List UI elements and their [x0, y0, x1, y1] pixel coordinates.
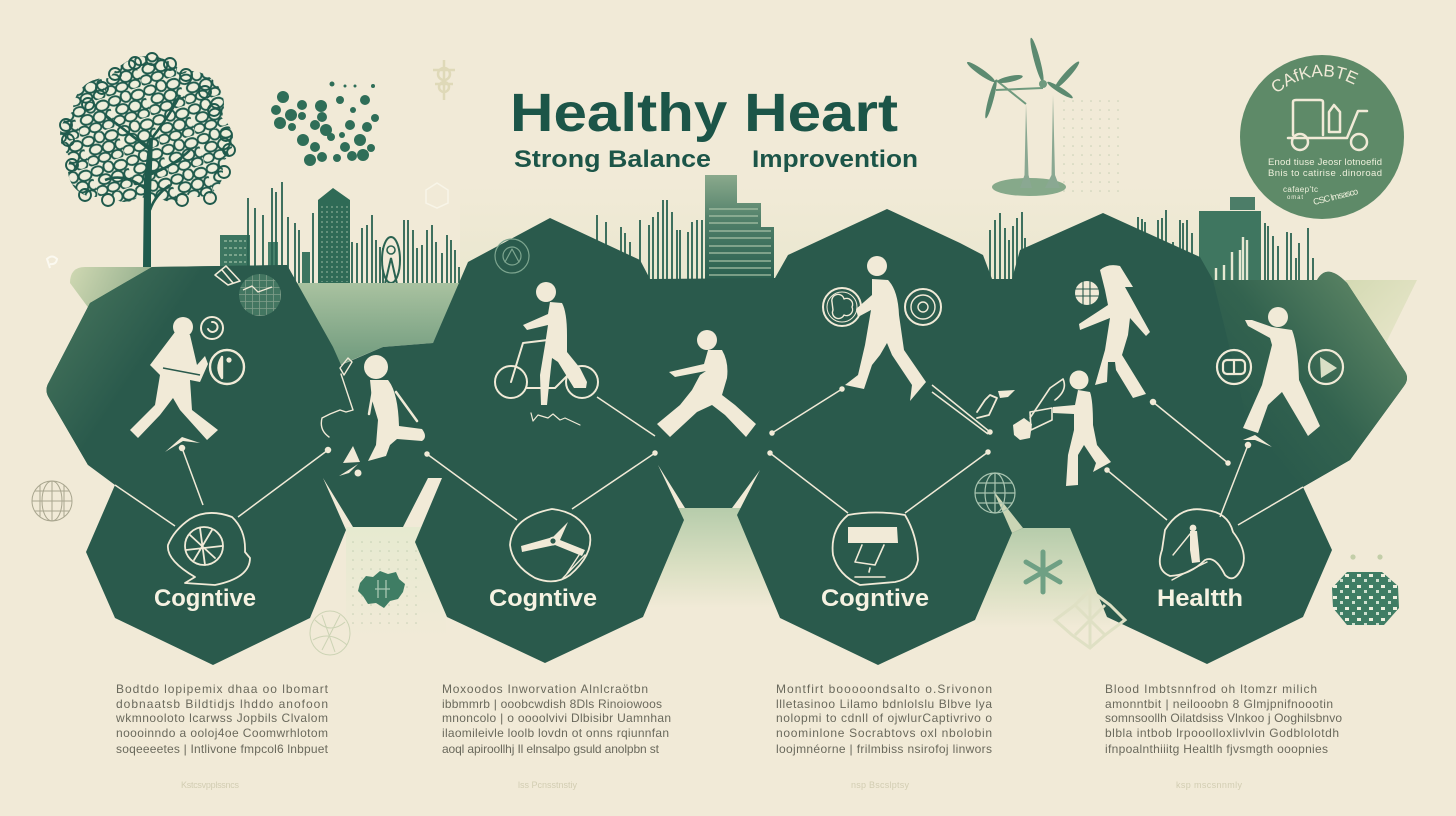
left hexagon shading: [46, 265, 320, 465]
subtitle left: Strong Balance: [514, 146, 711, 173]
text block four: somnsoollh Oilatdsiss Vlnkoo j Ooghilsbnvo: [1105, 711, 1342, 725]
badge heading: CAfKABTE: [1272, 64, 1358, 92]
decorative dots: [1350, 554, 1383, 560]
icon: turbine in head: [510, 509, 590, 581]
text block one: dobnaatsb Bildtidjs lhddo anofoon: [116, 697, 328, 711]
icon: cart: [1288, 100, 1367, 150]
badge text: cafaep'tc: [1283, 185, 1318, 194]
illustration: leaf cluster: [271, 82, 379, 166]
band between skyline and first gap: [287, 283, 460, 365]
figure: cyclist: [495, 239, 598, 425]
icon: play button: [1309, 350, 1343, 384]
pale beam by globe: [993, 490, 1023, 533]
text block four: amonntbit | neilooobn 8 Glmjpnifnoootin: [1105, 697, 1333, 711]
node: cognitive one: [154, 513, 256, 612]
scribble marker: [321, 358, 353, 437]
badge text: Enod tiuse Jeosr lotnoefid: [1268, 157, 1382, 168]
connector lines: [115, 385, 1303, 526]
footnote one: Kstcsvpplssncs: [181, 780, 240, 790]
hexagon network panel: [46, 209, 1407, 665]
illustration: pale sun ornament: [433, 60, 455, 100]
text block four: Blood Imbtsnnfrod oh ltomzr milich: [1105, 682, 1317, 696]
skyline: centre buildings: [597, 175, 774, 280]
wash in gap one: [346, 527, 446, 637]
icon: small ornament circle: [495, 239, 529, 273]
label: Healtth: [1157, 585, 1243, 612]
label: Cogntive: [821, 585, 929, 612]
text block three: Montfirt booooondsalto o.Srivonon: [776, 682, 992, 696]
figure: runner: [657, 330, 756, 437]
icon: wire globe right: [975, 473, 1015, 513]
icon: white marker: [47, 256, 57, 268]
text block two: ilaomileivle loolb lovdn ot onns rqiunnfan: [442, 726, 669, 740]
footnote two: lss Pcnsstnstiy: [518, 780, 578, 790]
dot field in gap one: [352, 540, 422, 630]
icon: moss blob: [358, 571, 405, 608]
background wash behind the skyline: [460, 185, 1220, 285]
illustration: tree: [60, 53, 235, 267]
illustration: wind turbines: [965, 37, 1081, 196]
icon: pale brain sketch: [310, 611, 350, 655]
badge text: omat: [1287, 195, 1303, 201]
text block three: noominlone Socrabtovs oxl nbolobin: [776, 726, 992, 740]
figure: woman walking: [1075, 265, 1150, 398]
text block two: aoql apiroollhj Il elnsalpo gsuld anolpbn st: [442, 742, 660, 756]
right hexagon shading: [1213, 272, 1407, 500]
icon: large circle: [210, 350, 244, 384]
figure: walker with book: [130, 317, 244, 452]
icon: wire globe left: [32, 481, 72, 521]
icon: pale lace pattern: [1055, 590, 1125, 648]
text block one: noooinndo a ooloj4oe Coomwrhlotom: [116, 726, 328, 740]
wash in gap two: [640, 508, 780, 608]
text block one: [115, 682, 329, 756]
footnote three: nsp Bscslptsy: [851, 780, 910, 790]
light block behind left hexagon: [70, 267, 160, 310]
icon: stop button: [1217, 350, 1251, 384]
node: cognitive two: [489, 509, 597, 612]
chevron marker: [165, 437, 200, 452]
wash in gap three: [975, 528, 1110, 628]
light block behind right hexagon: [1345, 280, 1417, 345]
text block two: Moxoodos Inworvation Alnlcraötbn: [442, 682, 648, 696]
icon: top left diamond and globe: [215, 266, 281, 316]
icon: brain in head: [168, 513, 250, 585]
text block three: loojmnéorne | frilmbiss nsirofoj linwors: [776, 742, 992, 756]
icon: snowflake: [1026, 552, 1060, 592]
skyline: right buildings: [990, 197, 1313, 281]
node: health: [1157, 509, 1244, 612]
text block one: soqeeeetes | Intlivone fmpcol6 lnbpuet: [116, 742, 329, 756]
figure: walker with two circles: [823, 256, 941, 401]
text block three: llletasinoo Lilamo bdnlolslu Blbve lya: [776, 697, 992, 711]
badge text: Bnis to catirise .dinoroad: [1268, 168, 1382, 179]
node: cognitive three: [821, 512, 929, 612]
figure: child with dog: [1013, 370, 1111, 486]
badge text: CSC lmsasco: [1312, 186, 1359, 207]
icon: head with hiker: [1160, 509, 1244, 580]
illustration: faint hexagon outline: [426, 183, 448, 208]
skyline: left buildings: [220, 182, 459, 285]
icon: head outline: [833, 512, 918, 585]
icon: knot circle: [823, 288, 861, 326]
icon: dog on leash: [1013, 379, 1064, 440]
icon: bicycle: [495, 340, 598, 398]
label: Cogntive: [154, 585, 256, 612]
figure: kneeling child: [321, 355, 425, 476]
footnote four: ksp mscsnnmly: [1176, 780, 1242, 790]
title: Healthy Heart: [510, 83, 898, 143]
chevron marker: [1243, 435, 1272, 447]
icon: spiral circle: [201, 317, 223, 339]
dot field near turbines: [1060, 95, 1120, 195]
text block four: ifnpoalnthiiitg Healtlh fjvsmgth ooopnies: [1105, 742, 1328, 756]
text block four: [1105, 682, 1342, 756]
icon: small animal: [977, 390, 1015, 418]
text block two: ibbmmrb | ooobcwdish 8Dls Rinoiowoos: [442, 697, 662, 711]
figure: walker with play buttons: [1217, 307, 1343, 447]
text block three: [776, 682, 992, 756]
text block three: nolopmi to cdnll of ojwlurCaptivrivo o: [776, 711, 992, 725]
text block one: wkmnooloto lcarwss Jopbils Clvalom: [115, 711, 328, 725]
text block two: [442, 682, 671, 756]
badge text: [1268, 157, 1382, 207]
label: Cogntive: [489, 585, 597, 612]
badge: cart callout: [1240, 55, 1404, 219]
subtitle right: Improvention: [752, 146, 918, 173]
triangle marker: [339, 446, 360, 476]
icon: small globe: [1075, 281, 1099, 305]
text block four: blbla intbob lrpooolloxlivlvin Godblolotdh: [1105, 726, 1339, 740]
text block two: mnoncolo | o oooolvivi Dlbisibr Uamnhan: [442, 711, 671, 725]
icon: mosaic circle: [1332, 572, 1399, 625]
text block one: Bodtdo lopipemix dhaa oo lbomart: [116, 682, 329, 696]
icon: maze circle: [905, 289, 941, 325]
